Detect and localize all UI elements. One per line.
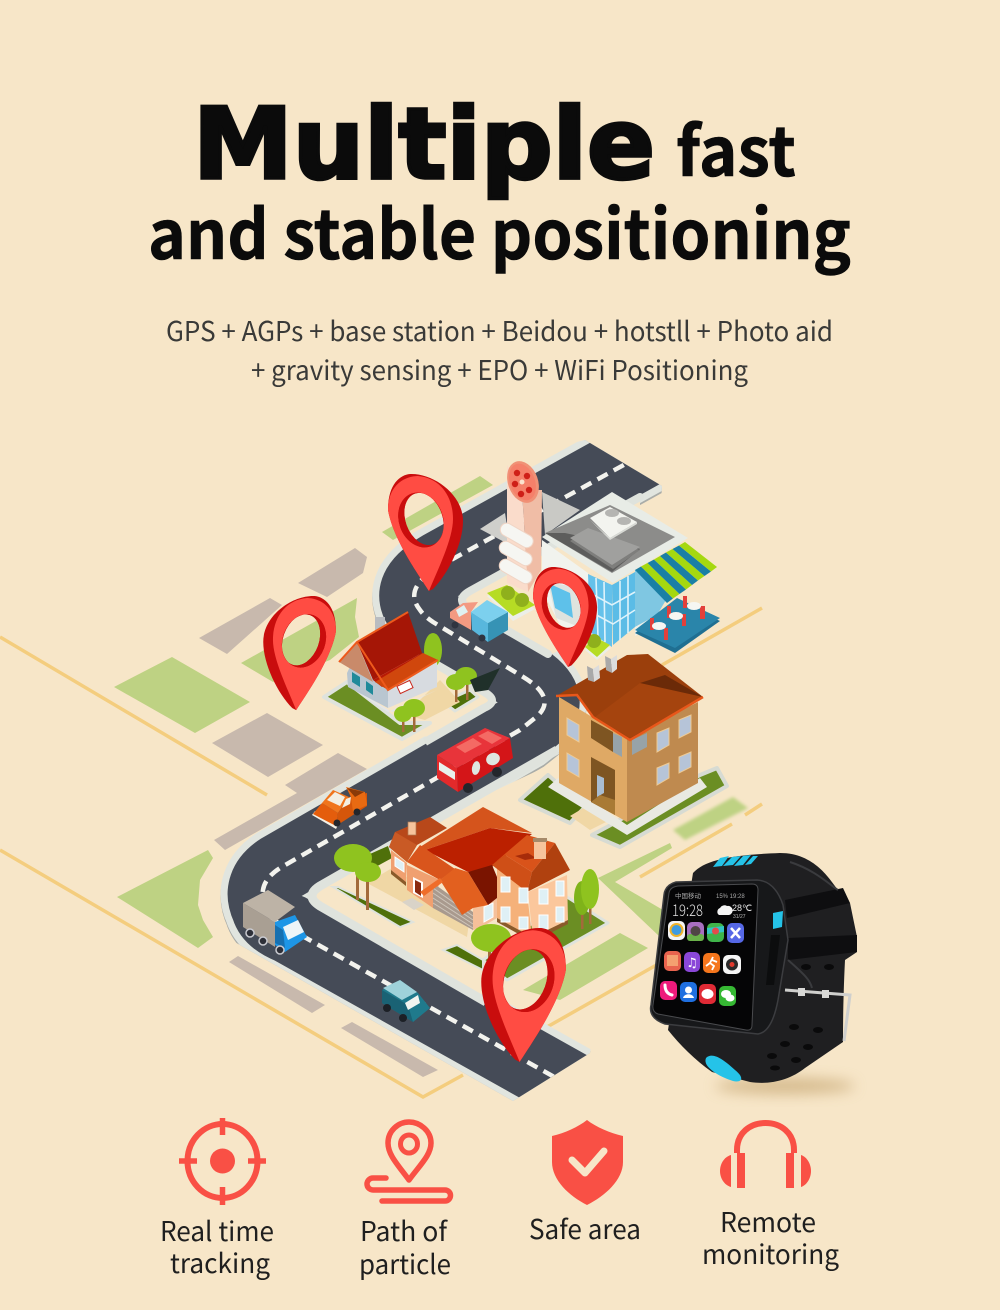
subtitle: + gravity sensing + EPO + WiFi Positioning [251, 349, 748, 388]
feature: remote monitoring [702, 1123, 839, 1272]
doorway [591, 757, 615, 815]
base [548, 778, 707, 835]
feature: path of particle [359, 1122, 451, 1282]
grey box truck [243, 890, 307, 954]
location pin at shop [533, 567, 597, 667]
strap inner details [767, 862, 857, 1070]
windows [567, 715, 691, 785]
label [160, 1210, 274, 1281]
trees [446, 667, 477, 702]
label: Safe area [529, 1208, 641, 1247]
shop roof [542, 492, 688, 583]
subtitle: GPS + AGPs + base station + Beidou + hotstll + Photo aid [166, 310, 833, 349]
roof [339, 642, 373, 682]
label: Path of [360, 1210, 448, 1249]
side button [773, 911, 783, 929]
smartwatch [651, 853, 857, 1094]
title [148, 88, 851, 279]
weather: 31/27 [733, 914, 746, 920]
delivery van [450, 600, 508, 642]
patio with tables [635, 596, 720, 653]
door behind pin [548, 582, 582, 628]
big tan house [520, 654, 727, 847]
orange pickup truck [312, 787, 367, 829]
location pin left [263, 596, 336, 710]
label [702, 1201, 839, 1272]
left chimney [408, 822, 416, 835]
lower front wall [407, 865, 440, 908]
cyan band bottom [705, 1056, 741, 1081]
label: tracking [170, 1242, 270, 1281]
label [359, 1210, 451, 1282]
roof [556, 654, 703, 740]
label: monitoring [702, 1233, 839, 1272]
trees [334, 844, 381, 910]
subtitle [166, 310, 833, 388]
chimneys [587, 655, 617, 682]
title: Multiple [193, 88, 655, 202]
weather: 28℃ [732, 903, 752, 913]
lawn [324, 682, 430, 739]
tree behind house [424, 633, 442, 680]
teal jeep [382, 980, 430, 1022]
feature: real time tracking [160, 1118, 274, 1281]
app icons: ♫ [686, 956, 698, 971]
lawns [483, 897, 608, 980]
location pin top [388, 474, 463, 591]
city map illustration [0, 444, 762, 1099]
buckle [785, 988, 850, 1041]
icon: headphones [720, 1123, 811, 1188]
driveway [367, 868, 470, 937]
location pin bottom [481, 928, 566, 1062]
front gable roof [407, 845, 455, 880]
shop building [480, 457, 720, 660]
main roof [420, 807, 532, 850]
weather [717, 903, 752, 920]
big orange house [333, 807, 608, 980]
road [263, 444, 660, 1099]
tree shadow on road [470, 668, 500, 692]
status bar: 中国移动 [675, 890, 702, 900]
left wing [391, 850, 407, 882]
screen [653, 884, 758, 1030]
icon: crosshair [179, 1118, 266, 1205]
watch case [651, 880, 788, 1034]
clock: 19:28 [672, 897, 703, 921]
walls [559, 697, 627, 822]
garage [433, 883, 473, 930]
icon: shield [552, 1120, 623, 1205]
icon: pin with path [367, 1122, 451, 1201]
ground plots [0, 476, 762, 1097]
pizza sign tower [497, 457, 544, 592]
walls [345, 684, 437, 712]
house 1 [324, 612, 478, 739]
label: Real time [160, 1210, 274, 1249]
cyan stripes [713, 855, 758, 867]
door and steps [413, 877, 423, 898]
red bus [437, 728, 513, 793]
forecourt [480, 513, 510, 545]
title: and stable positioning [148, 180, 851, 279]
chimney [375, 617, 385, 631]
app icons [660, 921, 744, 1006]
road islands [312, 497, 640, 1005]
shadow [715, 1078, 855, 1094]
tower [497, 868, 532, 937]
planters [487, 588, 535, 621]
title: fast [676, 97, 796, 196]
status time: 15% 19:28 [716, 894, 745, 900]
label: particle [359, 1243, 451, 1282]
striped awning [635, 542, 717, 603]
lawn [520, 775, 585, 823]
strap [668, 853, 857, 1083]
feature: safe area [529, 1120, 641, 1247]
tower chimney [534, 841, 546, 859]
shop walls [542, 540, 613, 647]
balcony [591, 720, 613, 752]
label: Remote [720, 1201, 816, 1240]
peach wall section [473, 898, 497, 930]
